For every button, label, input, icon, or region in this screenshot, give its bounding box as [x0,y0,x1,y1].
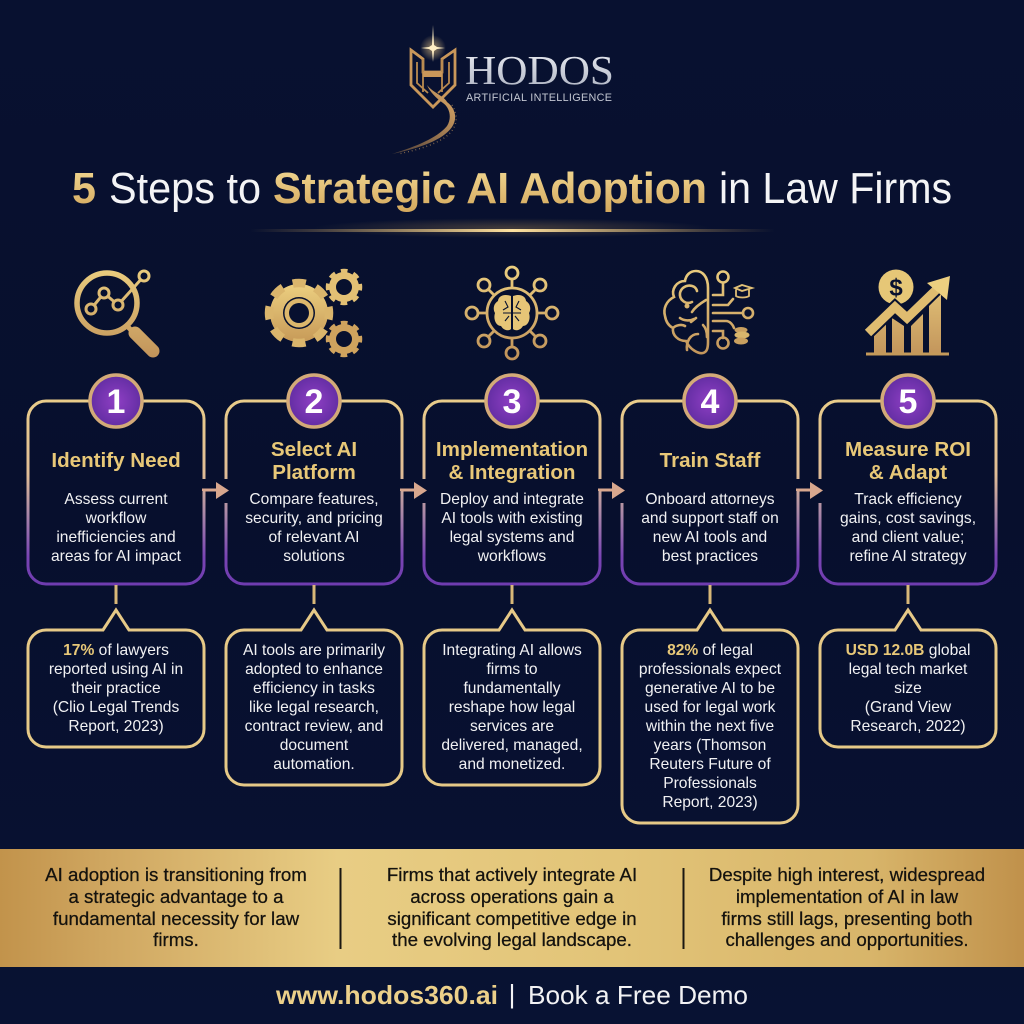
step 1 stat text: (Clio Legal Trends [53,699,179,716]
step 2 insight text: AI tools are primarily [243,642,385,659]
step 4 stat text: years (Thomson [654,737,766,754]
takeaway 2: the evolving legal landscape. [392,929,632,950]
step 4 arrow [798,482,823,499]
step 4 stat text: Report, 2023) [662,794,758,811]
step 1 description: workflow [85,510,147,527]
step 2 heading [271,438,357,484]
step 5 stat text: USD 12.0B global [846,642,970,659]
step 5 heading: & Adapt [869,461,947,484]
logo [392,25,614,154]
step 5 stat text: size [894,680,922,697]
step 1 [28,375,229,747]
step 2 description: Compare features, [249,491,379,508]
step 2 heading: Select AI [271,438,357,461]
footer call to action: www.hodos360.ai [275,980,498,1010]
step 3 description: legal systems and [450,529,574,546]
step 4 description: best practices [662,548,758,565]
step 4 stat text: professionals expect [639,661,782,678]
step 5 description: and client value; [852,529,964,546]
step 3 arrow [600,482,625,499]
title: Steps to [109,164,261,213]
takeaway 2: Firms that actively integrate AI [387,864,637,885]
step 1 number badge [90,375,142,427]
step 1 description: areas for AI impact [51,548,182,565]
step 3 insight text [441,642,583,773]
takeaway 3: challenges and opportunities. [725,929,969,950]
step 3 insight text: fundamentally [463,680,561,697]
step 4 description: and support staff on [641,510,779,527]
logo tagline: ARTIFICIAL INTELLIGENCE [466,92,612,104]
icon: ROI growth chart [866,270,950,356]
step 3 insight text: Integrating AI allows [442,642,582,659]
footer call to action: Book a Free Demo [528,980,748,1010]
step 1 stat text: Report, 2023) [68,718,164,735]
step 2 [226,375,427,785]
step 5 connector [906,585,910,604]
step 1 description: inefficiencies and [56,529,176,546]
step 5 description: gains, cost savings, [840,510,976,527]
step 5 card [820,401,996,584]
step 4 stat text: Reuters Future of [649,756,771,773]
step 1 arrow [204,482,229,499]
footer call to action [275,979,748,1010]
step 5 heading [845,438,971,484]
takeaway 3: firms still lags, presenting both [721,908,973,929]
title [72,164,952,213]
takeaway 3: implementation of AI in law [736,886,959,907]
takeaway 2 [387,864,637,950]
title: in Law Firms [719,164,952,213]
step 1 stat text [49,642,183,735]
step 1 heading: Identify Need [51,449,181,472]
step 1 description [51,491,182,565]
step 3 number badge: 3 [503,383,521,421]
footer call to action: | [509,979,515,1009]
step 3 card [424,401,600,584]
step 3 heading [436,438,588,484]
step 1 stat text: reported using AI in [49,661,183,678]
step 2 description [245,491,383,565]
step 1 connector [114,585,118,604]
step 1 description: Assess current [64,491,168,508]
icon: AI brain network [466,267,558,359]
logo wordmark: HODOS [465,47,614,93]
step 3 number badge [486,375,538,427]
step 2 number badge [288,375,340,427]
takeaway 2: across operations gain a [410,886,614,907]
step 2 description: security, and pricing [245,510,383,527]
icon: brain circuit [664,271,753,353]
step 4 number badge [684,375,736,427]
step 3 insight text: firms to [486,661,538,678]
step 2 insight text: adopted to enhance [245,661,383,678]
step 3 insight text: delivered, managed, [441,737,583,754]
step 5 [820,375,996,747]
step 1 number badge: 1 [107,383,125,421]
step 5 number badge [882,375,934,427]
step 5 stat callout [820,610,996,747]
step 5 description: Track efficiency [854,491,962,508]
step 3 [424,375,625,785]
icon: ROI growth chart: $ [889,274,903,302]
step 4 stat text: Professionals [663,775,757,792]
step 2 connector [312,585,316,604]
step 3 heading: & Integration [448,461,576,484]
step 2 heading: Platform [272,461,356,484]
step 3 description [440,491,584,565]
step 4 stat text: within the next five [645,718,774,735]
step 1 stat callout [28,610,204,747]
step 4 heading: Train Staff [660,449,760,472]
step 4 description: Onboard attorneys [645,491,775,508]
logo emblem [411,25,455,107]
step 3 description: workflows [477,548,546,565]
step 4 stat text: used for legal work [645,699,776,716]
step 2 insight text: contract review, and [245,718,383,735]
step 4 [622,375,823,823]
step 5 stat text: Research, 2022) [850,718,966,735]
step 2 card [226,401,402,584]
takeaway band [0,849,1024,967]
step 3 description: AI tools with existing [441,510,583,527]
step 3 heading: Implementation [436,438,588,461]
step 5 stat text [846,642,970,735]
step 2 insight text: automation. [273,756,355,773]
step 4 stat text: generative AI to be [645,680,775,697]
icon: magnifier with chart [77,271,153,351]
step 2 insight text: efficiency in tasks [253,680,375,697]
step 2 arrow [402,482,427,499]
logo sparkle trail [392,85,456,154]
step 4 description: new AI tools and [653,529,767,546]
step 2 description: of relevant AI [268,529,360,546]
step 2 insight text: like legal research, [249,699,379,716]
step 1 stat text: their practice [71,680,161,697]
step 5 stat text: (Grand View [865,699,952,716]
step 2 number badge: 2 [305,383,323,421]
step 4 card [622,401,798,584]
step 3 insight text: services are [470,718,554,735]
step 5 heading: Measure ROI [845,438,971,461]
takeaway 1: a strategic advantage to a [68,886,284,907]
step 2 insight text [243,642,385,773]
takeaway 1: AI adoption is transitioning from [45,864,307,885]
step 4 number badge: 4 [701,383,720,421]
takeaway 1: firms. [153,929,199,950]
step 4 stat text [639,642,782,811]
title: 5 [72,164,96,213]
takeaway 3 [709,864,985,950]
step 5 stat text: legal tech market [849,661,968,678]
step 5 description [840,491,976,565]
title: Strategic AI Adoption [273,164,707,213]
step 2 insight callout [226,610,402,785]
step 4 description [641,491,779,565]
takeaway 1 [45,864,307,950]
takeaway 1: fundamental necessity for law [53,908,300,929]
step 1 stat text: 17% of lawyers [63,642,169,659]
step 3 insight text: reshape how legal [449,699,575,716]
step 3 insight text: and monetized. [459,756,565,773]
step 4 stat text: 82% of legal [667,642,753,659]
step 4 connector [708,585,712,604]
icon: gears [269,271,360,355]
step 3 description: Deploy and integrate [440,491,584,508]
step 4 stat callout [622,610,798,823]
step 3 connector [510,585,514,604]
step 5 number badge: 5 [899,383,917,421]
step 3 insight callout [424,610,600,785]
step 2 description: solutions [283,548,345,565]
step 5 description: refine AI strategy [849,548,967,565]
step 2 insight text: document [280,737,349,754]
takeaway 2: significant competitive edge in [387,908,637,929]
step 1 card [28,401,204,584]
takeaway 3: Despite high interest, widespread [709,864,985,885]
